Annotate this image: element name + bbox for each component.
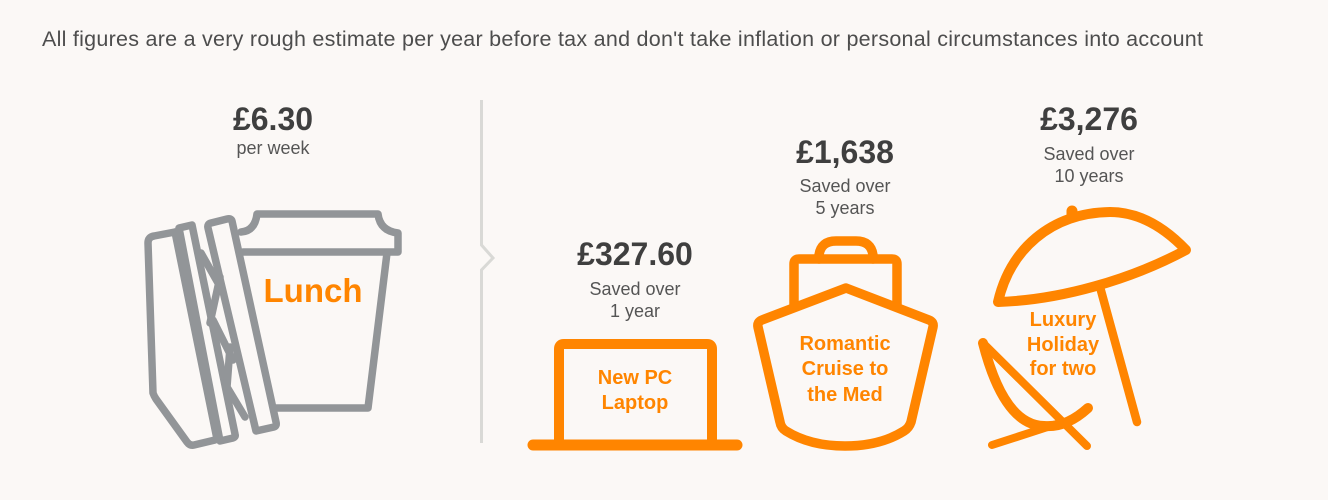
price: 6.30 per week: [233, 101, 313, 158]
icon: sandwich: [148, 219, 276, 445]
price: 3,276 saved over 10 years: £3,276: [1040, 101, 1138, 137]
label: Lunch: Lunch: [264, 272, 362, 309]
label: Romantic Cruise to the Med: [799, 333, 891, 406]
label: Romantic Cruise to the Med: Cruise to: [802, 358, 888, 380]
price: 1,638 saved over 5 years: [796, 134, 894, 218]
icon: deck chair: [983, 343, 1088, 446]
label: Luxury Holiday for two: Holiday: [1027, 334, 1100, 356]
icon: laptop: [533, 344, 737, 445]
label: New PC Laptop: [598, 367, 672, 414]
price: 6.30 per week: per week: [236, 138, 311, 158]
label: Romantic Cruise to the Med: the Med: [807, 384, 883, 406]
price: 1,638 saved over 5 years: £1,638: [796, 134, 894, 170]
panel: savings over 1 year: [533, 236, 737, 445]
price: 327.60 saved over 1 year: Saved over: [589, 279, 681, 299]
price: 3,276 saved over 10 years: Saved over: [1043, 144, 1135, 164]
label: Romantic Cruise to the Med: Romantic: [799, 333, 891, 355]
price: 6.30 per week: £6.30: [233, 101, 313, 137]
heading: disclaimer text: All figures are a very rough estimate per year before tax and don't take inflation or personal circumstances into account: [42, 27, 1203, 51]
label: Luxury Holiday for two: for two: [1030, 358, 1096, 380]
price: 1,638 saved over 5 years: Saved over: [799, 176, 891, 196]
price: 3,276 saved over 10 years: [1040, 101, 1138, 186]
price: 1,638 saved over 5 years: 5 years: [815, 198, 875, 218]
panel: lunch cost: [148, 101, 398, 445]
price: 3,276 saved over 10 years: 10 years: [1054, 166, 1124, 186]
icon: parasol: [998, 211, 1186, 422]
label: Luxury Holiday for two: Luxury: [1030, 309, 1097, 331]
panel: savings over 5 years: [758, 134, 933, 446]
icon: cruise ship: [758, 241, 933, 446]
panel: savings over 10 years: [983, 101, 1186, 446]
price: 327.60 saved over 1 year: [577, 236, 693, 321]
label: Luxury Holiday for two: [1027, 309, 1100, 380]
price: 327.60 saved over 1 year: £327.60: [577, 236, 693, 272]
price: 327.60 saved over 1 year: 1 year: [610, 301, 660, 321]
label: New PC Laptop: New PC: [598, 367, 672, 389]
divider with chevron: [482, 100, 493, 443]
icon: coffee cup: [241, 214, 398, 408]
label: New PC Laptop: Laptop: [602, 392, 668, 414]
